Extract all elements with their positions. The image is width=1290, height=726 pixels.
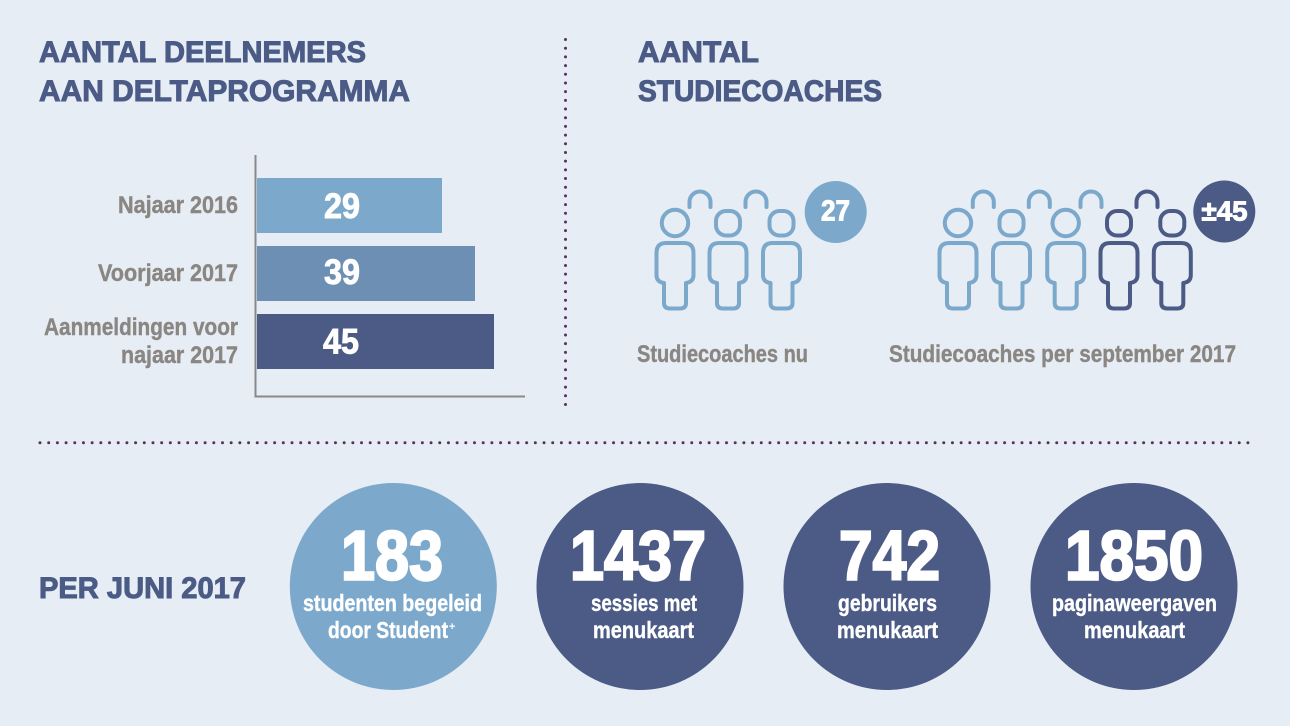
badge: 27: 27: [821, 196, 850, 228]
stat circle: 183: studenten begeleid: [303, 590, 482, 616]
heading: aantal deelnemers: [39, 36, 410, 108]
stat circle: 742: [784, 483, 990, 690]
stat circle: 1850: [1030, 483, 1238, 690]
stat circle: 1850: 1850: [1065, 516, 1203, 594]
stat circle: 183: [290, 483, 497, 690]
icon group: studiecoaches per september 2017, light: [940, 192, 1102, 308]
stat circle: 1850: menukaart: [1084, 617, 1185, 643]
bar chart: deelnemers: [44, 155, 525, 396]
heading: aantal studiecoaches: [638, 36, 882, 108]
stat circle: 183: door Student: [328, 617, 448, 643]
stat circle: 1437: [536, 483, 744, 690]
stat circle: 742: 742: [839, 516, 940, 594]
stat circle: 742: menukaart: [837, 617, 938, 643]
stat circle: 1850: paginaweergaven: [1052, 590, 1217, 616]
stat circle: 742: gebruikers: [838, 590, 937, 616]
heading: per juni 2017: PER JUNI 2017: [39, 572, 246, 605]
bar: aanmeldingen voor najaar 2017: [44, 314, 494, 369]
heading: aantal studiecoaches: STUDIECOACHES: [638, 75, 882, 108]
heading: aantal deelnemers: AAN DELTAPROGRAMMA: [39, 75, 410, 108]
bar: voorjaar 2017: Voorjaar 2017: [98, 260, 238, 287]
chart axes: [256, 155, 525, 396]
bar: najaar 2016: Najaar 2016: [118, 192, 238, 219]
label: studiecoaches nu: Studiecoaches nu: [637, 341, 808, 368]
stat circle: 1437: 1437: [570, 516, 706, 594]
bar: aanmeldingen voor najaar 2017: 45: [323, 322, 359, 362]
stat circle: 183: 183: [341, 516, 443, 594]
icon group: studiecoaches nu: [656, 192, 800, 308]
stat circle: 1437: sessies met: [591, 590, 697, 616]
heading: aantal studiecoaches: AANTAL: [638, 36, 759, 69]
label: studiecoaches per september 2017: Studiecoaches per september 2017: [889, 341, 1236, 368]
heading: aantal deelnemers: AANTAL DEELNEMERS: [39, 36, 366, 69]
stat circle: 183: +: [449, 621, 455, 633]
bar: aanmeldingen voor najaar 2017: najaar 2017: [121, 342, 238, 369]
badge: 27: [805, 181, 867, 243]
bar: voorjaar 2017: [98, 246, 475, 301]
stat circle: 1437: menukaart: [593, 617, 694, 643]
badge: plus minus 45: ±45: [1202, 196, 1248, 227]
icon group: studiecoaches per september 2017, dark: [1100, 192, 1191, 308]
badge: plus minus 45: [1193, 180, 1255, 242]
bar: najaar 2016: [118, 178, 442, 233]
bar: najaar 2016: 29: [324, 187, 360, 226]
bar: voorjaar 2017: 39: [324, 253, 360, 292]
bar: aanmeldingen voor najaar 2017: Aanmeldingen voor: [44, 314, 238, 341]
